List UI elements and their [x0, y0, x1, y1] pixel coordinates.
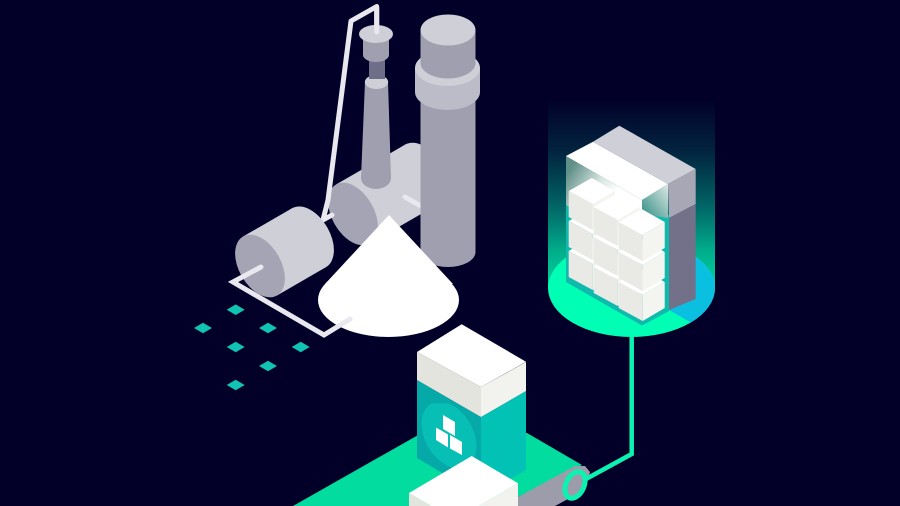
- rear horizontal cylinder: [318, 134, 457, 254]
- crate side: [668, 169, 696, 218]
- package circle emblem: [422, 404, 476, 468]
- sugar crate: [566, 126, 696, 326]
- white powder cone: [318, 215, 459, 337]
- crate top: [593, 126, 696, 184]
- front horizontal cylinder: [225, 198, 344, 306]
- white pipe from cylinder to cone: [233, 267, 350, 335]
- white pipe to chimney: [323, 6, 377, 220]
- small front package: [409, 456, 518, 506]
- connector line: [586, 335, 632, 479]
- teal diamond particles: [194, 304, 310, 390]
- chimney: [359, 8, 393, 189]
- conveyor roller ring: [561, 469, 589, 501]
- crate top band: [566, 142, 668, 200]
- conveyor belt: [293, 433, 590, 506]
- teal package: [417, 324, 526, 479]
- crate interior: [566, 190, 669, 326]
- tall column: [415, 14, 480, 267]
- package cube icons: [436, 415, 462, 455]
- glowing plate: [548, 100, 716, 340]
- illustration: sugar production: [194, 4, 715, 506]
- stacked sugar cubes: [569, 178, 665, 321]
